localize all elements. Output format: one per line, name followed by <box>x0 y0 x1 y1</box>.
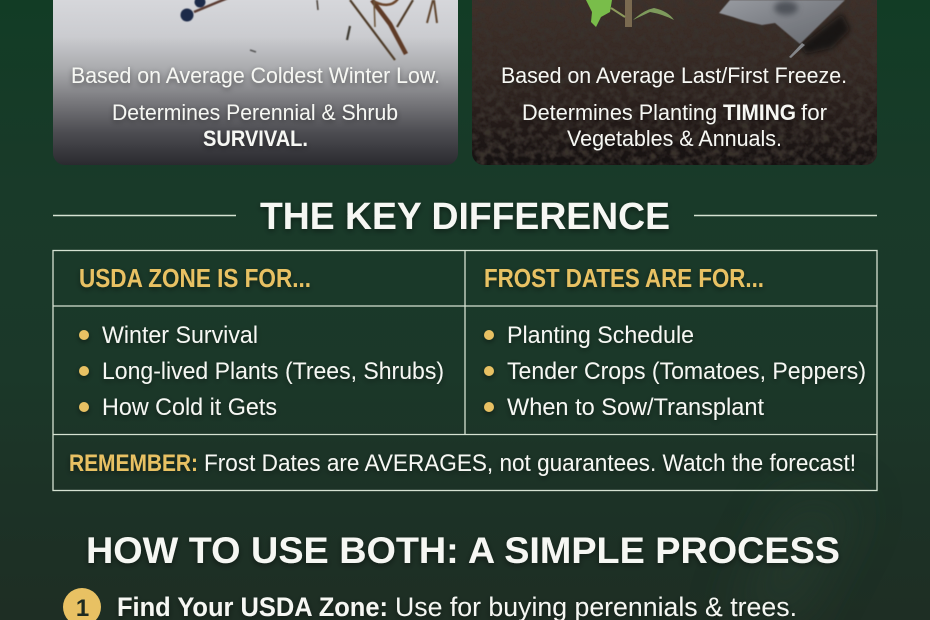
table frame <box>53 250 877 490</box>
column heading: frost dates: FROST DATES ARE FOR... <box>484 265 764 293</box>
list: USDA zone uses: Long-lived Plants (Trees, Shrubs) <box>102 358 444 385</box>
heading: how to use both: HOW TO USE BOTH: A SIMPLE PROCESS <box>86 529 840 571</box>
list: frost date uses <box>484 322 866 421</box>
reminder note: Frost Dates are AVERAGES, not guarantees. Watch the forecast! <box>204 450 856 477</box>
list: frost date uses: Planting Schedule <box>507 322 694 349</box>
list: frost date uses: When to Sow/Transplant <box>507 394 764 421</box>
caption: frost date determines: Determines Planting <box>522 100 717 125</box>
comparison table <box>53 250 877 490</box>
caption: frost date determines: TIMING <box>723 100 796 125</box>
step text <box>117 592 797 620</box>
panel: frost dates photo card <box>472 0 877 165</box>
caption: frost date basis: Based on Average Last/First Freeze. <box>501 63 847 88</box>
step number badge <box>63 588 101 620</box>
heading: the key difference: THE KEY DIFFERENCE <box>260 196 670 238</box>
photo: soil, seedling and spade <box>472 0 877 165</box>
panel: USDA zone photo card <box>53 0 458 165</box>
reminder note: REMEMBER: <box>69 450 198 477</box>
column heading: USDA zone: USDA ZONE IS FOR... <box>79 265 311 293</box>
caption: USDA zone determines: Determines Perennial & Shrub <box>112 100 398 125</box>
photo: snow with berries and twigs <box>53 0 458 165</box>
caption: survival: SURVIVAL. <box>203 126 308 151</box>
step 1 <box>63 588 797 620</box>
list: USDA zone uses <box>79 322 444 421</box>
caption: vegetables and annuals: Vegetables & Annuals. <box>567 126 782 151</box>
list: USDA zone uses: Winter Survival <box>102 322 258 349</box>
caption: USDA zone basis: Based on Average Coldest Winter Low. <box>71 63 440 88</box>
caption: frost date determines: for <box>801 100 827 125</box>
list: USDA zone uses: How Cold it Gets <box>102 394 277 421</box>
caption: frost date determines <box>522 100 827 125</box>
list: frost date uses: Tender Crops (Tomatoes, Peppers) <box>507 358 866 385</box>
